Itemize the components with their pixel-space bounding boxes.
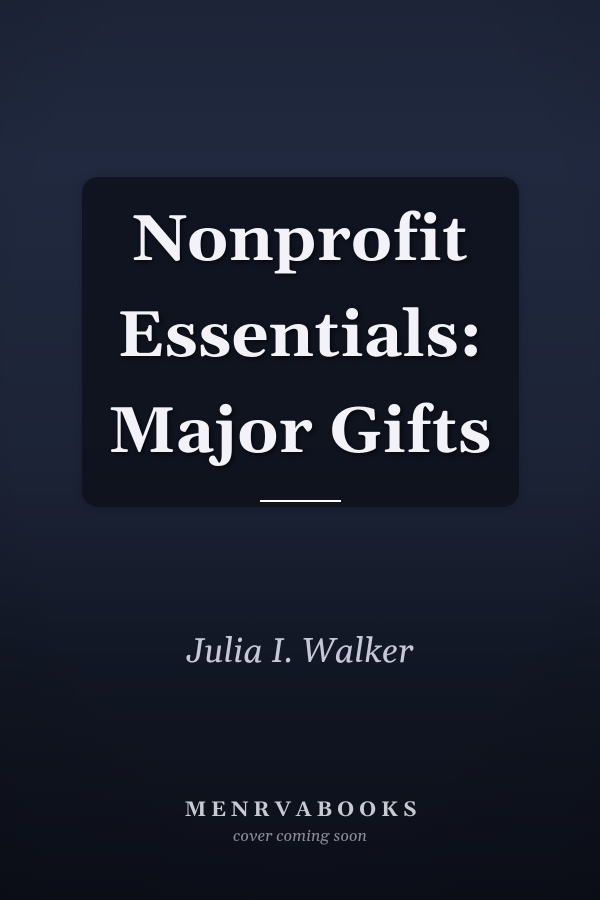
author name: Julia I. Walker <box>186 630 414 674</box>
title underline rule <box>260 500 341 502</box>
title <box>109 201 492 475</box>
title: Essentials: <box>117 297 483 379</box>
panel: title backdrop <box>82 177 519 507</box>
cover status note: cover coming soon <box>233 827 367 847</box>
title: Nonprofit <box>132 201 468 283</box>
publisher name: MENRVABOOKS <box>185 798 421 824</box>
title: Major Gifts <box>109 393 491 475</box>
